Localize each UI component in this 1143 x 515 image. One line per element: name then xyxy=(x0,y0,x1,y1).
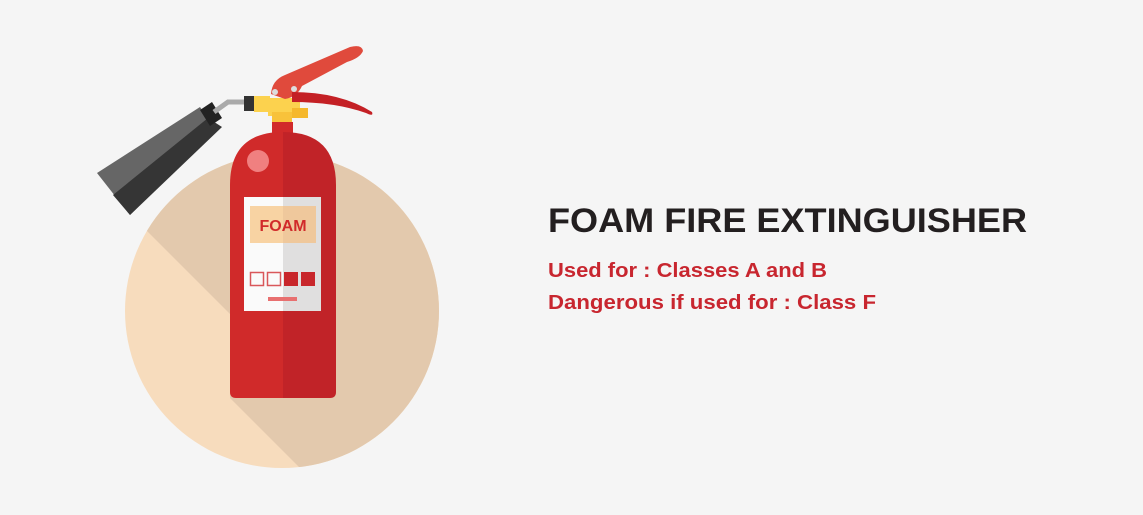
lever xyxy=(271,46,372,115)
hose xyxy=(214,102,246,112)
background circle with shadow xyxy=(125,162,439,468)
horn xyxy=(97,102,222,215)
icon: fire extinguisher xyxy=(97,46,372,398)
body xyxy=(230,132,336,398)
text: dangerous: Dangerous if used for : Class F xyxy=(548,292,876,314)
label panel: FOAM xyxy=(259,218,307,235)
text: used for: Used for : Classes A and B xyxy=(548,260,827,282)
neck xyxy=(272,122,293,138)
title: FOAM FIRE EXTINGUISHER xyxy=(548,202,1027,240)
valve xyxy=(254,96,308,124)
label panel xyxy=(244,197,321,311)
